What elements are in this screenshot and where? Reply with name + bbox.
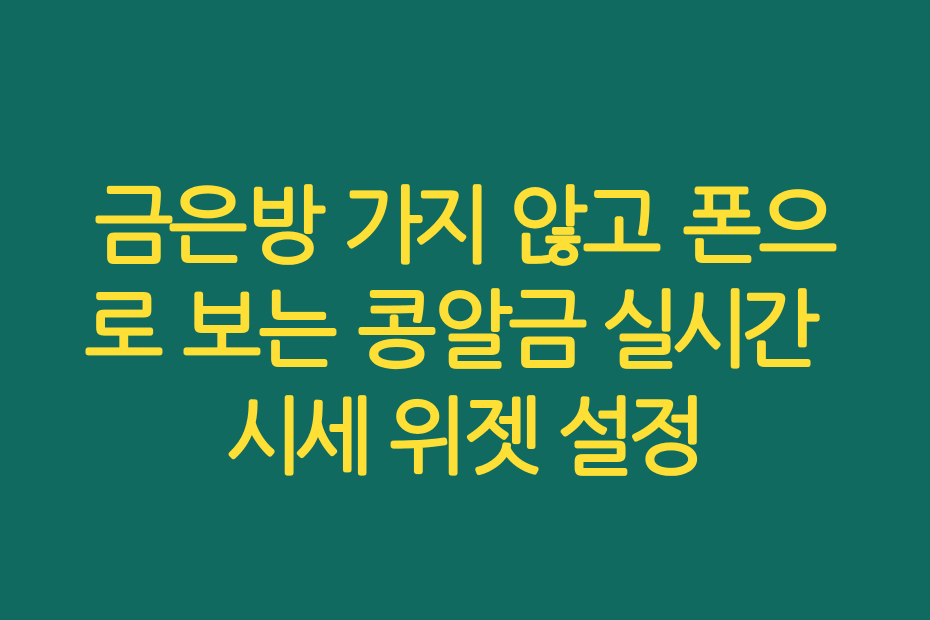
- title line 2: 로보는콩알금실시간: [85, 288, 819, 372]
- title: three-line heading: [85, 184, 837, 479]
- title line 1: 금은방가지않고폰으: [95, 184, 837, 268]
- title line 3: 시세위젯설정: [225, 395, 706, 479]
